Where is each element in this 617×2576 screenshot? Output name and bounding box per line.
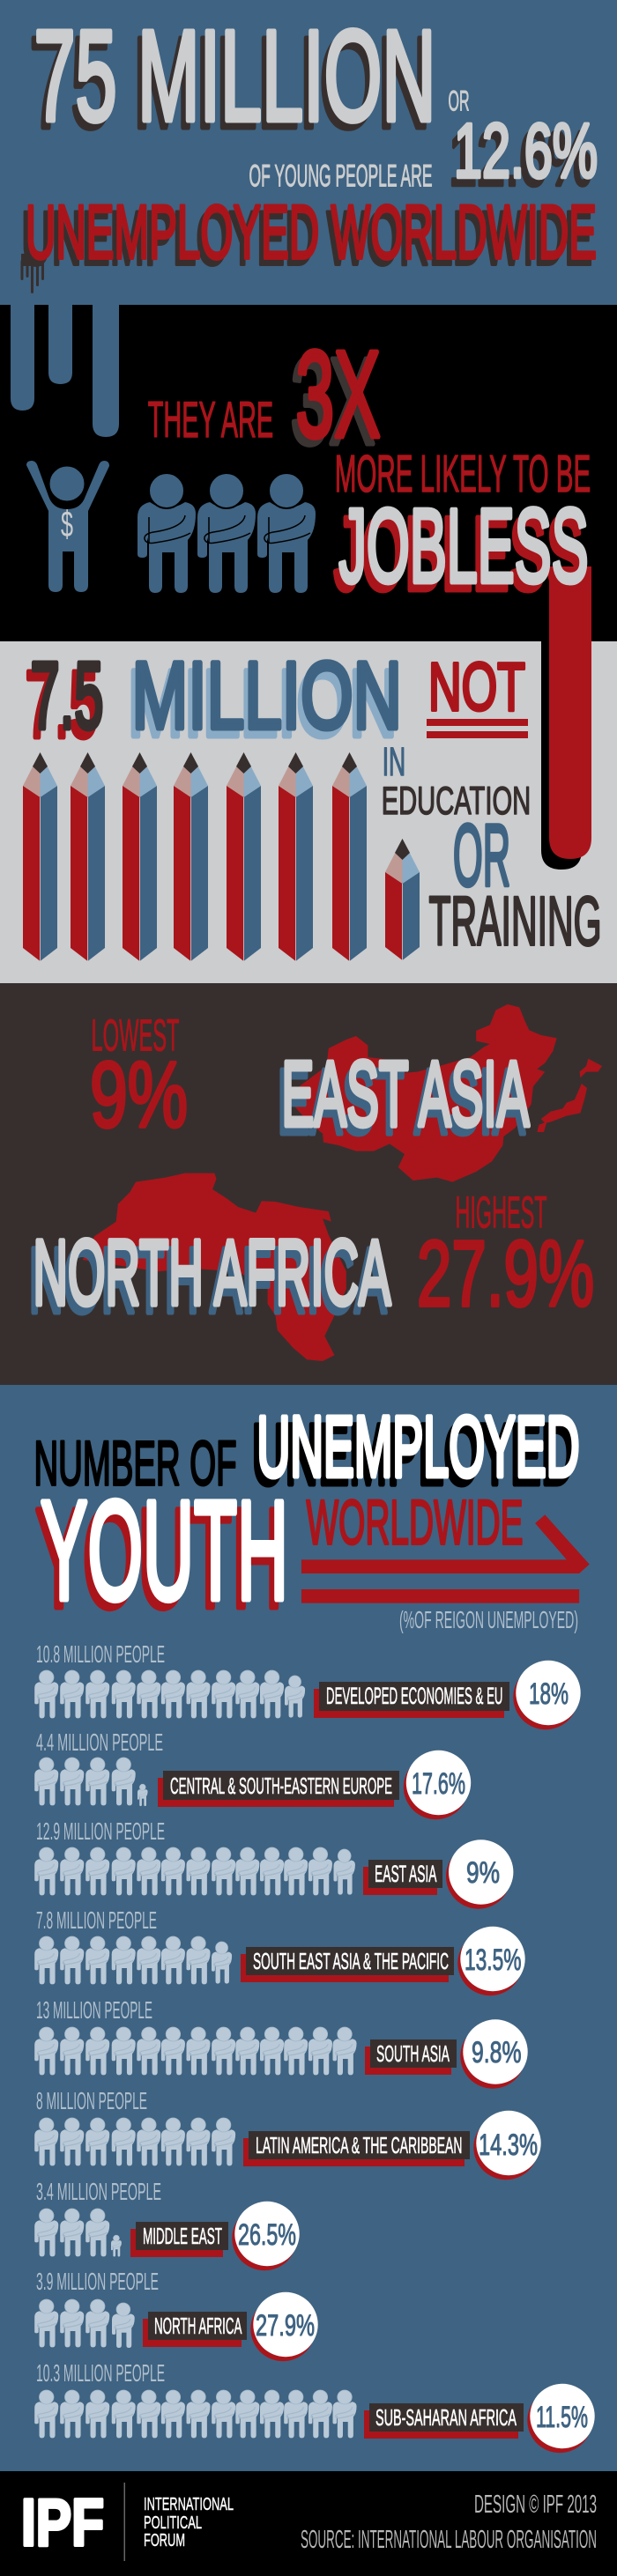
map: north africa xyxy=(83,1173,346,1361)
heading: number of: NUMBER OF xyxy=(33,1429,236,1499)
text: organisation name: INTERNATIONAL xyxy=(144,2495,234,2514)
row: developed economies and EU xyxy=(34,1640,581,1729)
label: people count: 10.3 MILLION PEOPLE xyxy=(36,2359,165,2387)
row: south asia xyxy=(34,1996,528,2089)
badge: percent xyxy=(513,1661,581,1729)
badge: percent: 11.5% xyxy=(536,2401,588,2434)
text: in: IN xyxy=(383,739,405,784)
text: education: EDUCATION xyxy=(382,780,531,823)
icon: black bar shadow xyxy=(541,641,582,870)
badge: percent xyxy=(446,1839,513,1909)
icon: blue drips xyxy=(11,305,119,437)
heading: 7.5: 7.5 xyxy=(30,643,104,749)
panel: three times more likely xyxy=(0,305,617,641)
row: east asia xyxy=(34,1817,513,1909)
badge: percent: 27.9% xyxy=(256,2309,315,2343)
row: sub-saharan africa xyxy=(34,2359,595,2453)
row: south east asia and the pacific: 7.8 MILLION PEOPLE xyxy=(36,1906,157,1934)
panel: number of unemployed youth worldwide xyxy=(0,1385,617,2471)
pictogram: people xyxy=(34,1758,148,1806)
tag: region xyxy=(143,2312,247,2347)
stat: 9 percent: 9% xyxy=(90,1043,188,1147)
label: people count: 3.9 MILLION PEOPLE xyxy=(36,2268,159,2295)
tag: region xyxy=(364,2403,524,2439)
stat: 3x: 3X xyxy=(291,333,375,470)
tag: region xyxy=(314,1682,509,1718)
badge: percent xyxy=(527,2384,595,2453)
heading: million: MILLION xyxy=(127,650,398,756)
row: latin america and the caribbean xyxy=(34,2087,541,2180)
tag: region: CENTRAL & SOUTH-EASTERN EUROPE xyxy=(170,1773,392,1799)
tag: region xyxy=(130,2222,228,2257)
panel: not in education or training: OR xyxy=(453,806,510,904)
text: of young people are: OF YOUNG PEOPLE ARE xyxy=(249,159,432,194)
panel: footer xyxy=(0,2471,617,2576)
label: people count: 3.4 MILLION PEOPLE xyxy=(36,2178,161,2205)
badge: percent: 9.8% xyxy=(472,2036,522,2069)
row: south east asia and the pacific xyxy=(34,1906,525,1995)
text: or: OR xyxy=(448,85,469,116)
heading: youth: YOUTH xyxy=(41,1471,288,1629)
badge: percent xyxy=(232,2202,300,2270)
heading: youth: YOUTH xyxy=(35,1479,283,1637)
tag: region xyxy=(158,1771,399,1807)
badge: percent: 17.6% xyxy=(412,1767,465,1801)
heading: youth xyxy=(35,1471,288,1637)
icon: red bar running through panels xyxy=(549,566,591,859)
text: organisation name xyxy=(144,2495,234,2550)
pictogram: people xyxy=(34,2118,235,2165)
text: they are: THEY ARE xyxy=(148,392,273,448)
pictogram: people xyxy=(34,1670,305,1718)
heading: 75 million xyxy=(29,4,435,155)
tag: region: MIDDLE EAST xyxy=(143,2223,222,2249)
label: people count: 12.9 MILLION PEOPLE xyxy=(36,1817,165,1845)
badge: percent xyxy=(473,2111,541,2180)
badge: percent xyxy=(404,1751,471,1819)
row: central and south-eastern europe xyxy=(34,1728,471,1819)
badge: percent xyxy=(457,1927,525,1995)
heading: 7.5 xyxy=(25,643,104,758)
tag: region: NORTH AFRICA xyxy=(154,2313,242,2339)
row: north africa xyxy=(34,2268,318,2361)
icon: three jobless people xyxy=(138,473,316,593)
heading: million: MILLION xyxy=(132,643,402,749)
tag: region xyxy=(243,2131,470,2166)
icon: half pencil xyxy=(385,839,420,960)
label: people count: 4.4 MILLION PEOPLE xyxy=(36,1728,163,1756)
arrow: double line xyxy=(301,1514,590,1603)
row: middle east xyxy=(34,2178,300,2270)
pictogram: people xyxy=(34,1936,232,1984)
badge: percent: 18% xyxy=(529,1677,569,1711)
logo: IPF: IPF xyxy=(21,2486,104,2560)
badge: percent: 9% xyxy=(466,1856,500,1890)
text: organisation name: FORUM xyxy=(144,2531,185,2550)
heading: 7.5: 7.5 xyxy=(25,652,99,758)
panel: headline xyxy=(0,0,617,306)
tag: region: SOUTH EAST ASIA & THE PACIFIC xyxy=(253,1948,449,1974)
tag: region: EAST ASIA xyxy=(375,1861,437,1887)
badge: percent: 13.5% xyxy=(465,1943,522,1977)
badge: percent: 26.5% xyxy=(238,2218,296,2252)
stat: 3x: 3X xyxy=(296,326,381,463)
badge: percent: 14.3% xyxy=(479,2128,538,2162)
tag: region: SOUTH ASIA xyxy=(376,2040,450,2067)
text: organisation name: POLITICAL xyxy=(144,2513,202,2533)
icon: seven pencils xyxy=(23,752,367,961)
panel: not in education or training xyxy=(0,641,617,983)
pictogram: people xyxy=(34,1847,355,1895)
pictogram: people xyxy=(34,2027,357,2075)
badge: percent xyxy=(460,2019,528,2089)
label: people count: 10.8 MILLION PEOPLE xyxy=(36,1640,165,1668)
heading: million xyxy=(127,643,402,756)
icon: paint drips xyxy=(21,254,44,293)
text: not with double underline xyxy=(427,649,528,738)
tag: region xyxy=(365,2039,457,2075)
stat: 3x xyxy=(291,326,381,470)
row: south asia: 13 MILLION PEOPLE xyxy=(36,1996,152,2024)
pictogram: people xyxy=(34,2209,122,2256)
heading: north africa xyxy=(28,1221,391,1332)
pictogram: people xyxy=(34,2390,357,2438)
tag: region xyxy=(241,1947,454,1982)
panel: regional extremes: LOWEST xyxy=(92,1010,180,1061)
tag: region xyxy=(363,1860,442,1895)
panel: regional extremes xyxy=(0,983,617,1385)
pictogram: people xyxy=(34,2299,135,2348)
text: not with double underline: NOT xyxy=(428,649,525,725)
icon: employed person with raised arms: $ xyxy=(61,503,73,544)
icon: employed person with raised arms xyxy=(26,461,109,592)
label: people count: 8 MILLION PEOPLE xyxy=(36,2087,147,2114)
map: east asia xyxy=(295,1004,602,1182)
badge: percent xyxy=(250,2292,318,2361)
